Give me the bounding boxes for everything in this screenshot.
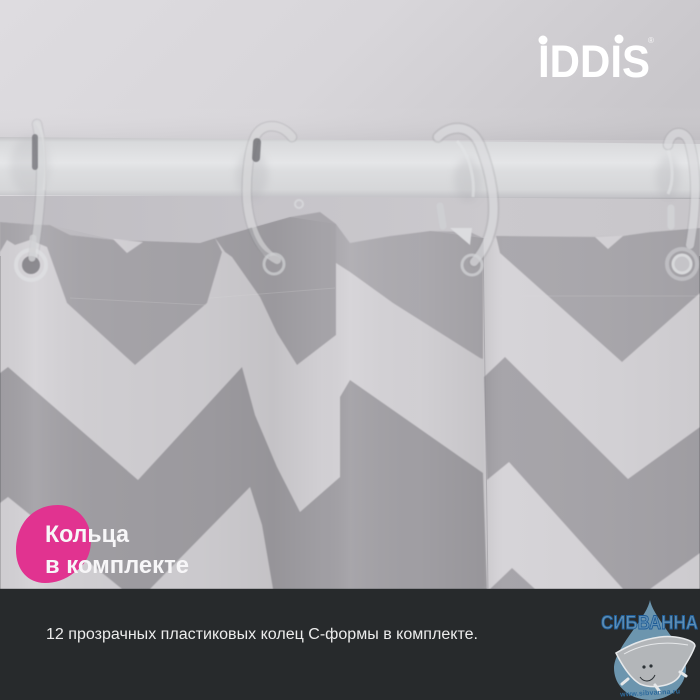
curtain fold shading [0,217,700,589]
feet [622,672,686,692]
badge: pink blob [16,505,91,583]
ring: third [438,128,494,275]
ring: left [16,122,46,280]
heading: rings included [45,521,189,579]
ring: right [667,133,697,279]
footer panel [0,589,700,700]
logo: iddis: ® [648,36,654,45]
curtain panel edges [483,238,488,589]
ring: second [247,126,303,274]
heading: rings included: Кольца [45,521,130,548]
curtain fabric with chevrons [0,212,700,589]
logo: sibvanna watermark [601,600,698,700]
description text: 12 прозрачных пластиковых колец С-формы в комплекте. [46,626,478,643]
face [642,665,646,669]
water drop [614,600,686,700]
curtain hem seam [70,288,700,305]
logo: iddis: IDDIS [538,36,650,87]
website: www.sibvanna.ru [619,688,680,699]
heading: rings included: в комплекте [45,552,189,579]
shower rod [0,136,700,202]
curtain rail back strip [0,196,700,256]
bathtub [616,637,695,687]
wall background [0,0,700,240]
